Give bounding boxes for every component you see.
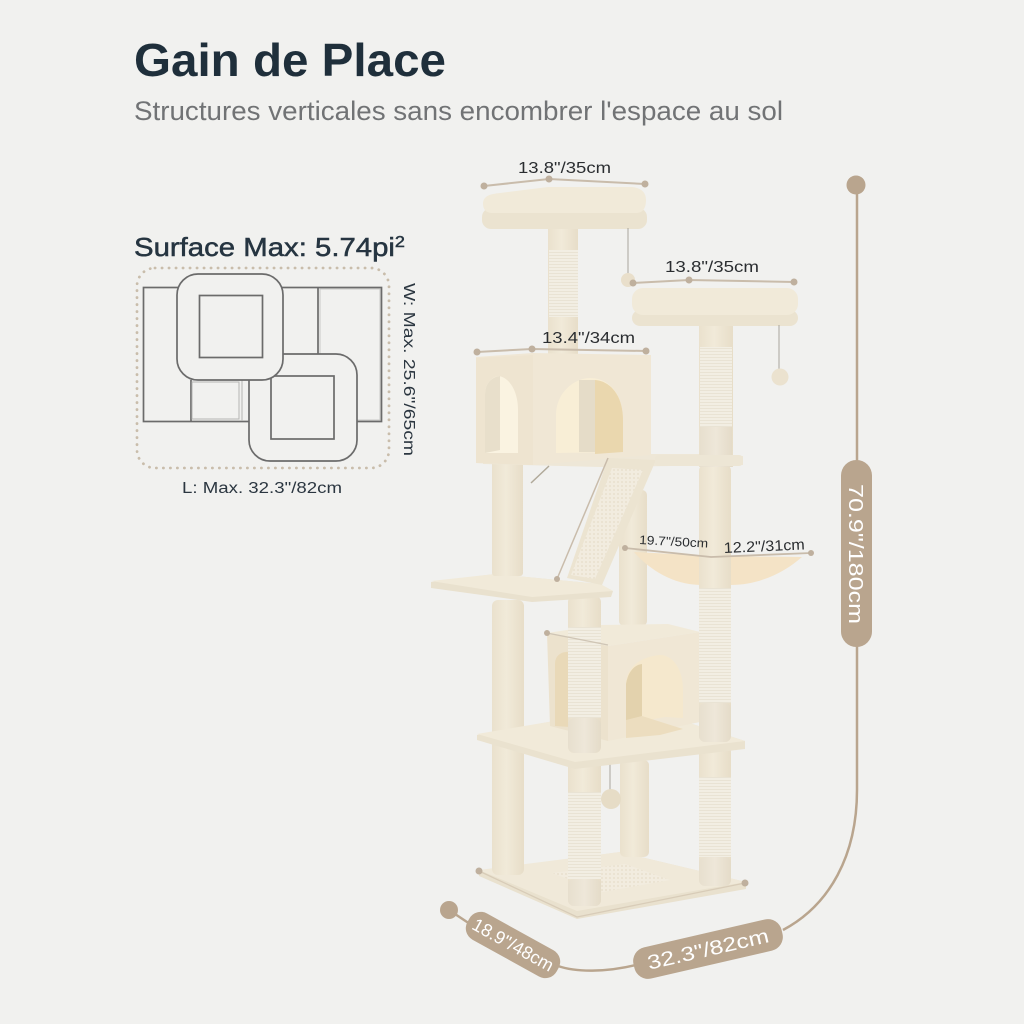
right middle post xyxy=(699,464,731,742)
dimension: top platform xyxy=(480,160,648,190)
dimension: hammock: 12.2"/31cm xyxy=(723,536,805,557)
cat tree xyxy=(431,187,802,919)
right hanging ball xyxy=(772,325,788,386)
length label: L: Max. 32.3"/82cm xyxy=(182,480,342,497)
left platform xyxy=(431,574,613,602)
dimension: upper house: 13.4"/34cm xyxy=(542,330,635,347)
dimension: lower house xyxy=(544,630,608,645)
height dimension xyxy=(783,176,872,930)
subtitle: Structures verticales sans encombrer l'espace au sol xyxy=(134,96,783,126)
dimension: upper house xyxy=(474,330,650,356)
height dimension: 70.9"/180cm xyxy=(844,484,866,624)
surface heading: 2 xyxy=(395,234,405,251)
upper house xyxy=(476,353,651,465)
dimension: second platform: 13.8"/35cm xyxy=(665,259,759,276)
length dimension: 32.3"/82cm xyxy=(645,925,771,975)
right lower post xyxy=(699,745,731,886)
dimension: base edges xyxy=(476,868,748,917)
front middle post xyxy=(568,596,601,753)
depth dimension xyxy=(440,901,640,983)
dimension: hammock xyxy=(622,533,814,557)
second platform xyxy=(632,288,798,326)
dimension: ramp xyxy=(531,458,608,582)
top post xyxy=(548,222,578,358)
top platform xyxy=(482,187,647,229)
panel: maximum floor surface xyxy=(134,232,417,497)
dotted footprint boundary xyxy=(137,268,389,468)
left post xyxy=(492,600,524,875)
dimension: hammock: 19.7"/50cm xyxy=(639,533,708,551)
upper right post xyxy=(699,322,733,467)
front arch opening xyxy=(556,378,623,454)
side arch opening xyxy=(485,376,518,453)
top hanging ball xyxy=(621,228,635,287)
lower house xyxy=(547,624,700,741)
left upper post xyxy=(492,460,523,576)
scratching ramp xyxy=(567,458,656,585)
floor plan diagram xyxy=(144,274,382,461)
title: Gain de Place xyxy=(134,34,446,86)
length dimension xyxy=(630,916,786,982)
front lower post xyxy=(568,760,601,906)
dimension: top platform: 13.8"/35cm xyxy=(518,160,611,177)
back post xyxy=(619,490,649,857)
width label: W: Max. 25.6"/65cm xyxy=(400,283,417,456)
dimension: second platform xyxy=(630,259,798,286)
house shelf xyxy=(483,454,743,467)
hammock xyxy=(634,552,802,585)
surface heading: Surface Max: 5.74pi xyxy=(134,232,365,262)
base platform xyxy=(479,852,746,919)
depth dimension: 18.9"/48cm xyxy=(469,914,557,976)
right shelf end xyxy=(655,455,743,466)
lower platform xyxy=(477,720,745,769)
hanging toy: lower ball xyxy=(601,762,621,809)
